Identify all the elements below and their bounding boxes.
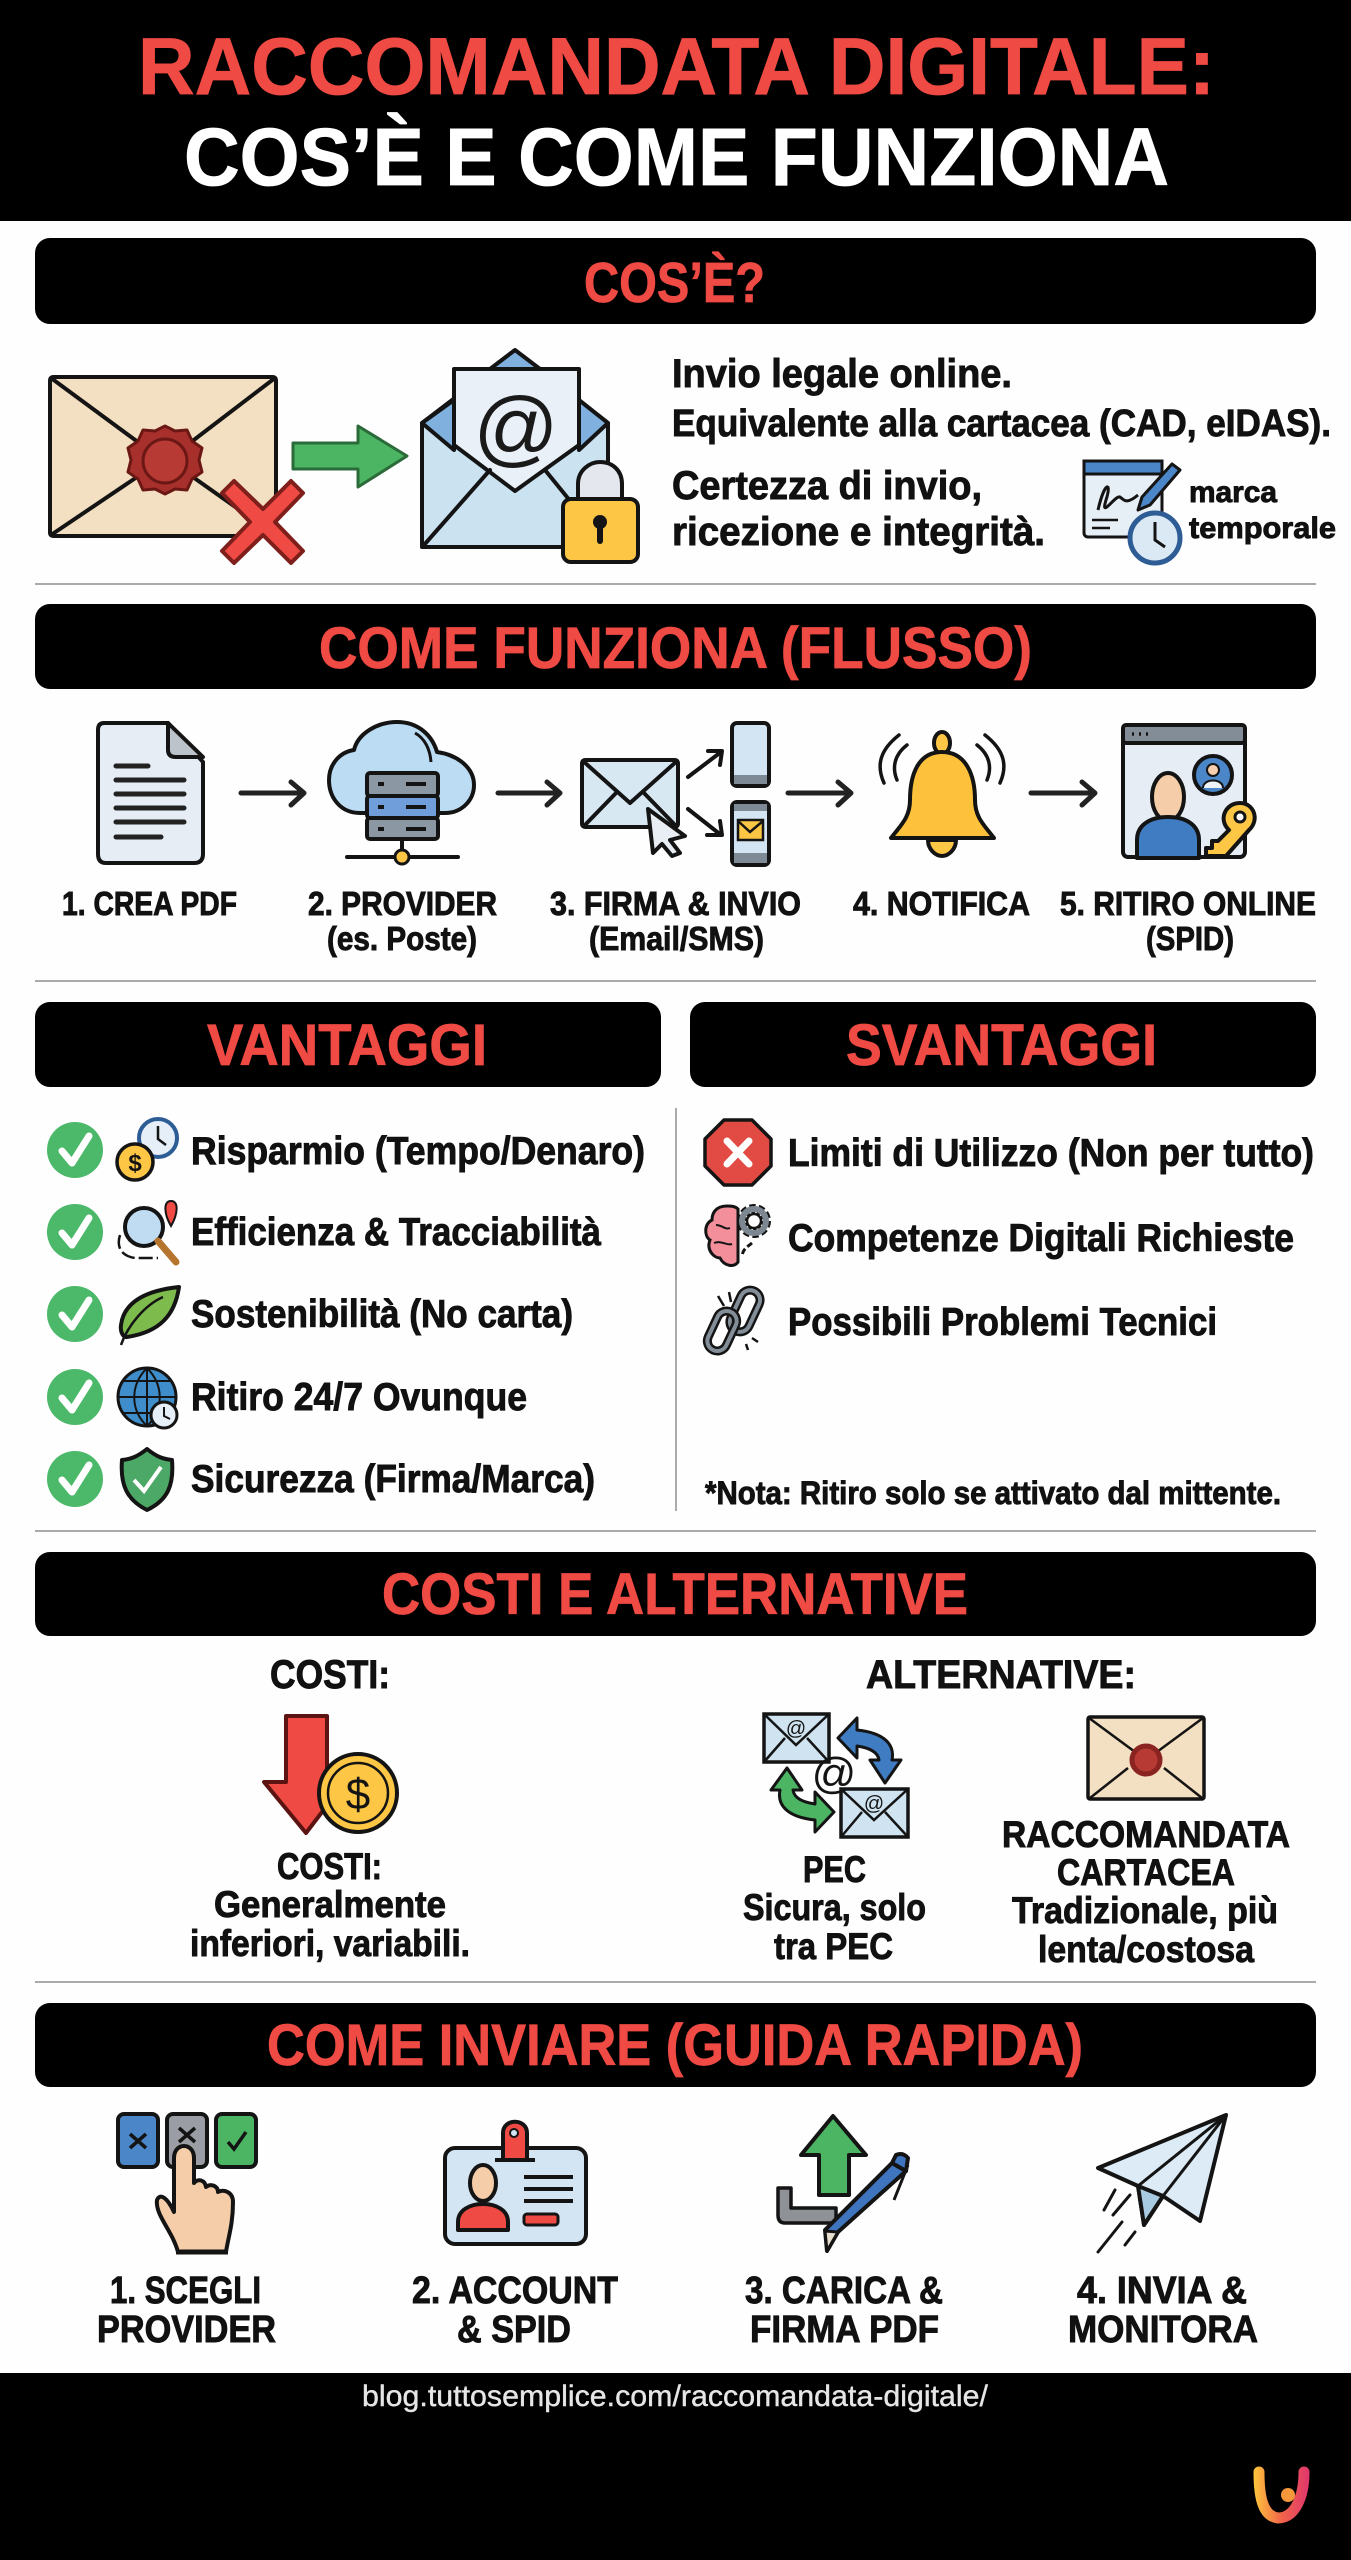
text: raccomandata cartacea: CARTACEA (1057, 1852, 1235, 1893)
arrow: step 2 to 3 (498, 782, 560, 805)
heading: vantaggi (35, 1002, 661, 1087)
icon: pec exchange (764, 1714, 908, 1837)
step 2 label: (es. Poste) (327, 920, 477, 957)
subheading: costi: COSTI: (270, 1653, 390, 1697)
item: ritiro (47, 1368, 527, 1428)
item: limiti (705, 1120, 1314, 1185)
icon: pec exchange: @ (864, 1793, 884, 1815)
guide labels (97, 2270, 1258, 2351)
icon: signature and timestamp (1084, 461, 1180, 563)
item: sostenibilita: Sostenibilità (No carta) (191, 1293, 573, 1336)
guide step 4: MONITORA (1068, 2309, 1258, 2351)
icon: online pickup window with key (1123, 725, 1255, 858)
step 2 label (308, 885, 497, 957)
icon: lower costs: $ (346, 1770, 370, 1819)
item: problemi (704, 1287, 1217, 1354)
text: raccomandata cartacea: Tradizionale, più (1012, 1890, 1278, 1931)
step 3 label (550, 885, 801, 957)
item: competenze: Competenze Digitali Richieste (788, 1217, 1294, 1260)
step 1 label: 1. CREA PDF (62, 885, 237, 922)
heading: come funziona: COME FUNZIONA (FLUSSO) (319, 616, 1032, 681)
guide step 3: FIRMA PDF (750, 2309, 939, 2351)
text: raccomandata cartacea: RACCOMANDATA (1002, 1814, 1290, 1855)
item: risparmio (47, 1119, 645, 1180)
arrow: step 4 to 5 (1031, 782, 1095, 805)
heading: cos'è (35, 238, 1316, 324)
text: pec: Sicura, solo (743, 1887, 926, 1928)
title line 2: COS’È E COME FUNZIONA (184, 112, 1169, 203)
icon: email envelope with lock (422, 350, 638, 562)
heading: costi e alternative: COSTI E ALTERNATIVE (382, 1562, 968, 1627)
guide step 3 (745, 2270, 943, 2351)
icon: email envelope with lock: @ (473, 380, 559, 474)
list: vantaggi (47, 1119, 645, 1510)
text: costi: COSTI: (277, 1846, 382, 1887)
text: costi: Generalmente (214, 1884, 446, 1925)
icon: pdf document (98, 723, 203, 863)
icon: pec exchange: @ (786, 1718, 806, 1740)
icon: lower costs (264, 1716, 397, 1833)
item: problemi: Possibili Problemi Tecnici (788, 1301, 1217, 1344)
step 4 label: 4. NOTIFICA (853, 885, 1030, 922)
step 3 label: 3. FIRMA & INVIO (550, 885, 801, 922)
heading: cos'è: COS’È? (584, 251, 765, 315)
item: sicurezza: Sicurezza (Firma/Marca) (191, 1458, 595, 1501)
text block: definition (672, 352, 1331, 554)
icon: envelope to phones (582, 723, 769, 865)
list: svantaggi (704, 1120, 1314, 1354)
text: costi (190, 1846, 470, 1964)
text: raccomandata cartacea: lenta/costosa (1038, 1929, 1254, 1970)
step 2 label: 2. PROVIDER (308, 885, 497, 922)
icon: paper plane (1098, 2115, 1226, 2252)
text: pec: PEC (803, 1849, 866, 1890)
text: raccomandata cartacea (1002, 1814, 1290, 1970)
item: risparmio: $ (128, 1150, 142, 1177)
text block: definition: Certezza di invio, (672, 464, 982, 508)
arrow: step 3 to 4 (788, 782, 851, 805)
logo (1259, 2472, 1304, 2518)
heading: svantaggi (690, 1002, 1316, 1087)
step 5 label: 5. RITIRO ONLINE (1060, 885, 1316, 922)
heading: come inviare (35, 2003, 1316, 2087)
heading: vantaggi: VANTAGGI (207, 1013, 487, 1078)
guide step 3: 3. CARICA & (745, 2270, 943, 2312)
note: *Nota: Ritiro solo se attivato dal mittente. (705, 1475, 1281, 1511)
item: limiti: Limiti di Utilizzo (Non per tutto) (788, 1132, 1314, 1175)
text: costi: inferiori, variabili. (190, 1923, 470, 1964)
text block: definition: ricezione e integrità. (672, 510, 1045, 554)
label: marca temporale: marca (1189, 476, 1277, 509)
guide step 1: PROVIDER (97, 2309, 276, 2351)
icon: pec exchange: @ (812, 1749, 856, 1798)
guide step 2: 2. ACCOUNT (412, 2270, 618, 2312)
guide step 1: 1. SCEGLI (110, 2270, 261, 2312)
footer url: blog.tuttosemplice.com/raccomandata-digitale/ (362, 2380, 989, 2413)
step 3 label: (Email/SMS) (589, 920, 764, 957)
title line 1: RACCOMANDATA DIGITALE: (138, 22, 1215, 112)
subheading: alternative: ALTERNATIVE: (866, 1653, 1136, 1697)
item: risparmio: Risparmio (Tempo/Denaro) (191, 1130, 645, 1173)
item: sostenibilita (47, 1286, 573, 1345)
item: efficienza: Efficienza & Tracciabilità (191, 1211, 601, 1254)
heading: come funziona (35, 604, 1316, 689)
label: marca temporale: temporale (1189, 512, 1336, 545)
arrow: step 1 to 2 (241, 782, 304, 805)
icon: account badge (445, 2122, 586, 2244)
guide step 1 (97, 2270, 276, 2351)
icon: paper letter (1088, 1717, 1204, 1799)
guide step 2: & SPID (457, 2309, 571, 2351)
header band with title (0, 0, 1351, 221)
icon: cloud provider (329, 722, 474, 864)
guide step 4: 4. INVIA & (1077, 2270, 1247, 2312)
guide step 2 (412, 2270, 618, 2351)
heading: costi e alternative (35, 1552, 1316, 1636)
label: marca temporale (1189, 476, 1336, 545)
item: sicurezza (47, 1449, 595, 1510)
item: efficienza (47, 1201, 601, 1262)
icon: notification bell (880, 732, 1004, 856)
text: pec (743, 1849, 926, 1967)
icon: paper letter crossed out (50, 377, 303, 563)
item: competenze (706, 1206, 1294, 1265)
heading: come inviare: COME INVIARE (GUIDA RAPIDA) (267, 2013, 1083, 2078)
guide step 4 (1068, 2270, 1258, 2351)
text: pec: tra PEC (774, 1926, 893, 1967)
icon: choose provider (118, 2114, 256, 2252)
step 5 label (1060, 885, 1316, 957)
step 5 label: (SPID) (1146, 920, 1234, 957)
text block: definition: Invio legale online. (672, 352, 1012, 396)
icon: upload and sign (778, 2116, 908, 2251)
step labels (62, 885, 1316, 957)
footer band (0, 2373, 1351, 2560)
heading: svantaggi: SVANTAGGI (846, 1013, 1157, 1078)
item: ritiro: Ritiro 24/7 Ovunque (191, 1376, 527, 1419)
arrow: paper to digital (293, 426, 407, 487)
